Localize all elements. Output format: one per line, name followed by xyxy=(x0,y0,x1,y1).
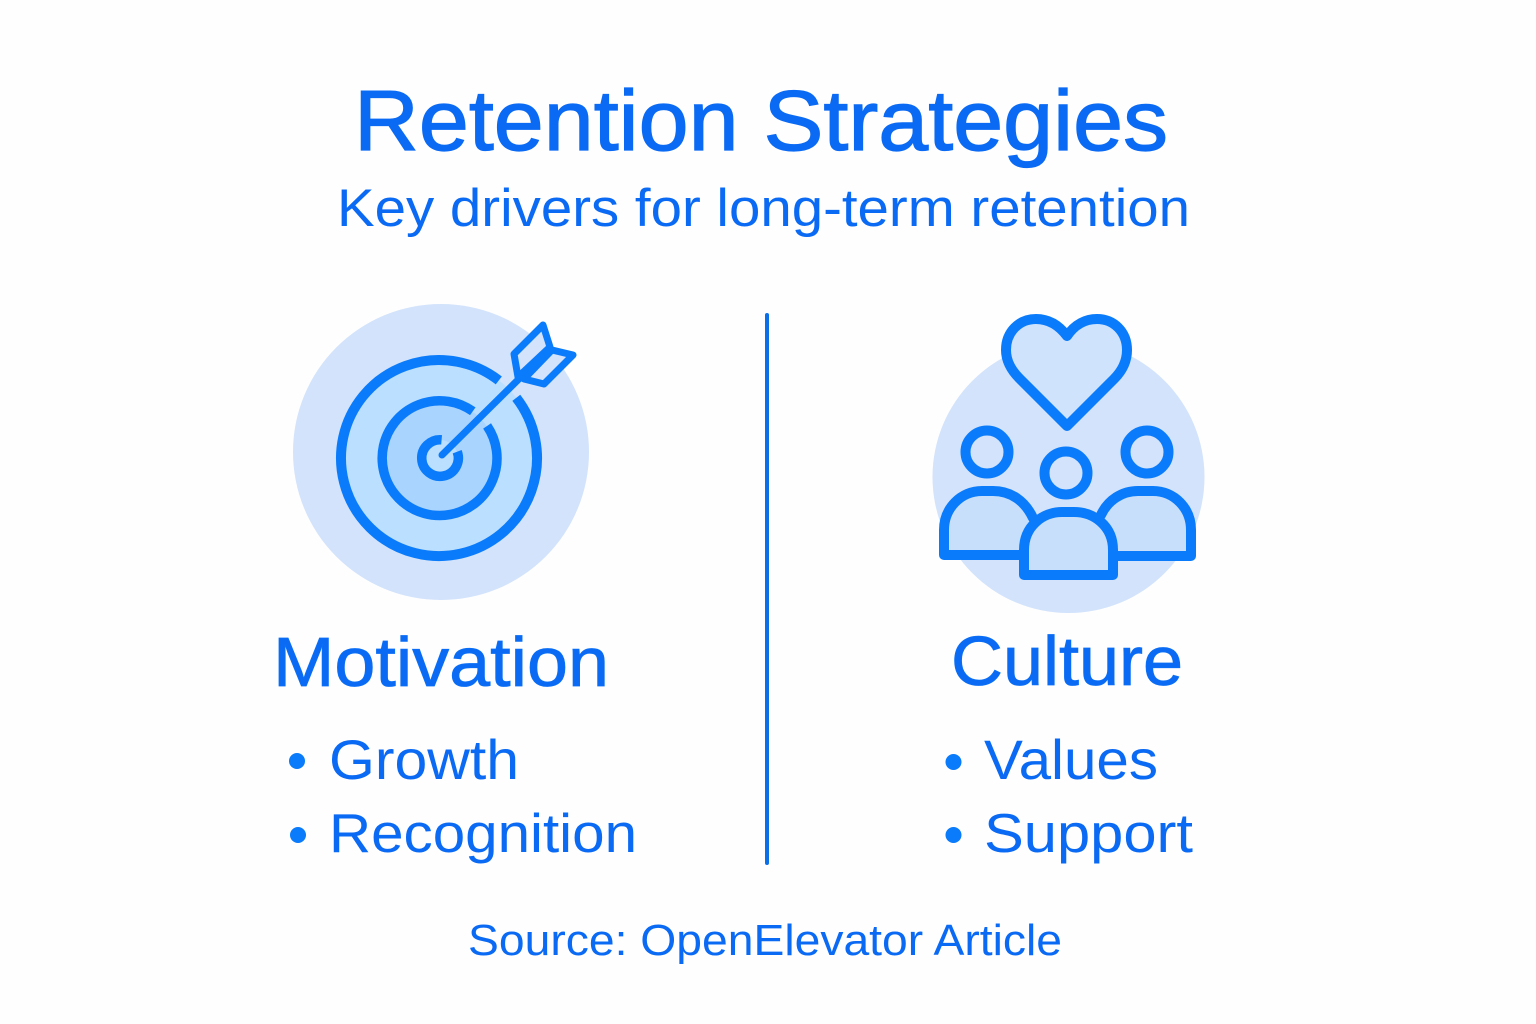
icon: target with arrow xyxy=(293,304,589,600)
list item: Recognition: Recognition xyxy=(329,802,637,864)
list item: Growth: Growth xyxy=(329,728,519,791)
panel: motivation xyxy=(273,304,637,864)
heading: Motivation: Motivation xyxy=(273,623,609,701)
icon: people with heart xyxy=(932,319,1204,613)
vertical divider xyxy=(765,313,769,865)
title: Retention Strategies xyxy=(354,74,1168,169)
list item: Values: Values xyxy=(984,728,1158,791)
panel: culture xyxy=(932,319,1204,864)
heading: Culture: Culture xyxy=(951,622,1183,700)
subtitle: Key drivers for long-term retention xyxy=(337,179,1190,238)
source note: Source: OpenElevator Article xyxy=(468,916,1062,965)
list item: Support: Support xyxy=(984,802,1193,864)
